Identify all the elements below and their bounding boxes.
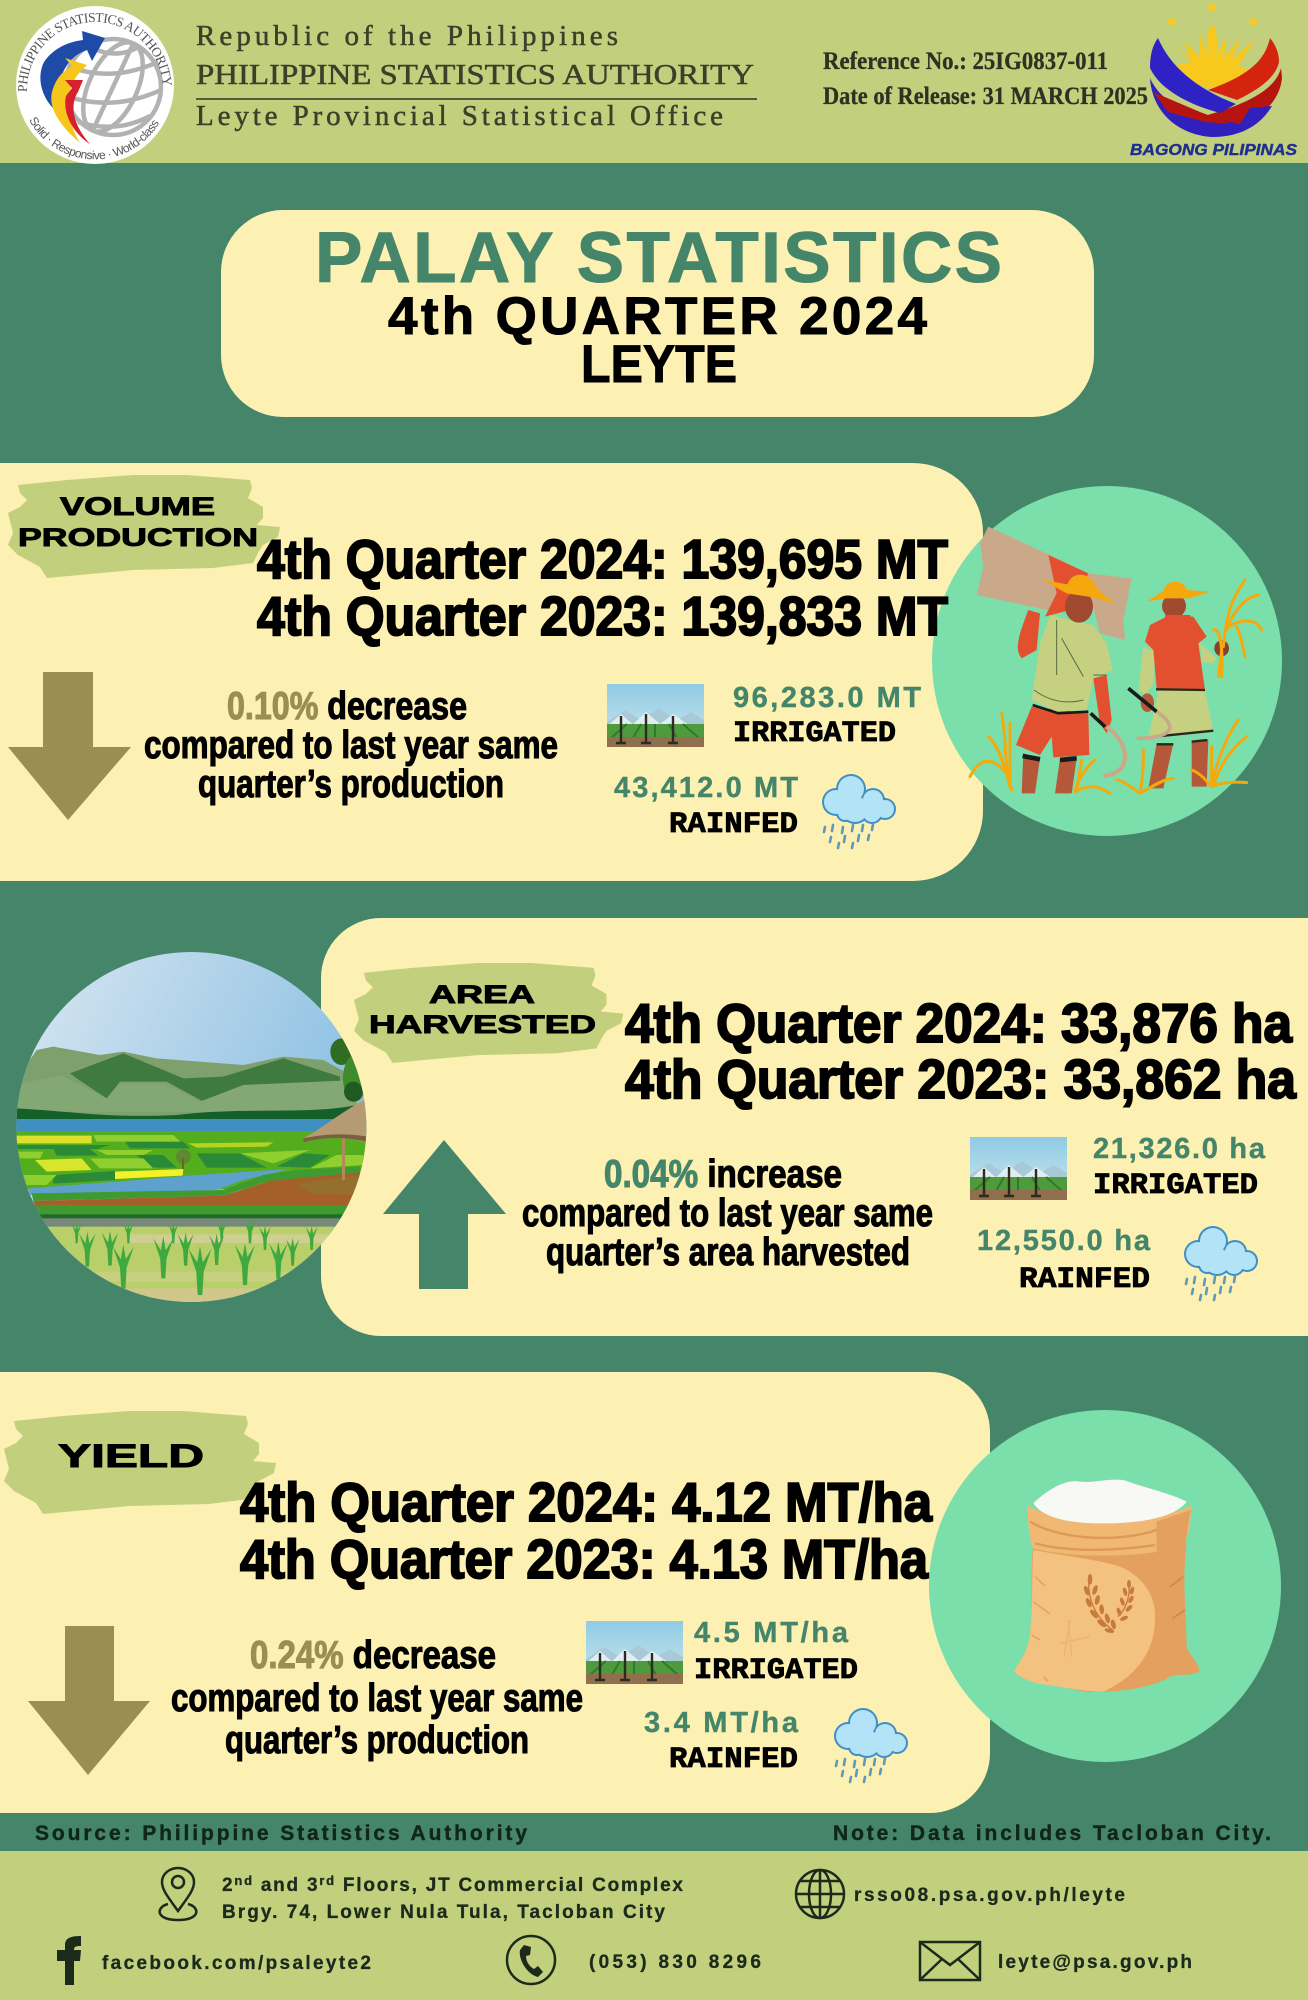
rainfed yield: RAINFED — [669, 1743, 798, 1777]
arrow: decrease — [8, 672, 131, 820]
address: 2 — [222, 1875, 233, 1896]
rainfed volume: RAINFED — [669, 808, 798, 842]
icon: PSA logo — [16, 6, 174, 164]
rainfed area: 12,550.0 ha — [977, 1225, 1151, 1257]
footer band — [0, 1851, 1308, 2000]
panel: area harvested — [10, 918, 1308, 1336]
text: volume change: compared to last year same — [144, 724, 558, 767]
data note: Note: Data includes Tacloban City. — [833, 1822, 1271, 1845]
label: volume production: VOLUME — [60, 493, 215, 521]
address: Brgy. 74, Lower Nula Tula, Tacloban City — [222, 1902, 665, 1923]
address: nd — [234, 1873, 252, 1888]
label: yield — [4, 1411, 276, 1514]
address: rd — [319, 1873, 334, 1888]
rainfed volume — [614, 772, 798, 842]
rainfed yield: 3.4 MT/ha — [644, 1707, 799, 1739]
text: volume change — [144, 685, 558, 806]
rainfed volume: 43,412.0 MT — [614, 772, 798, 804]
header: reference and release date — [823, 48, 1148, 110]
volume values: 4th Quarter 2024: 139,695 MT — [257, 528, 948, 590]
illustration: rice sack in green circle — [929, 1410, 1281, 1762]
irrigated volume — [733, 682, 921, 751]
subtitle: province: LEYTE — [581, 335, 737, 394]
irrigated area: IRRIGATED — [1093, 1169, 1258, 1203]
text: volume change: quarter’s production — [198, 763, 504, 806]
text: area change: 0.04% increase — [604, 1153, 842, 1196]
icon: location pin — [160, 1868, 196, 1920]
address: Floors, JT Commercial Complex — [336, 1875, 683, 1896]
icon: irrigated field — [584, 1621, 683, 1684]
label: area harvested: AREA — [429, 981, 535, 1009]
title: PALAY STATISTICS — [315, 219, 1002, 298]
icon: irrigated field — [968, 1137, 1067, 1200]
icon: irrigated field — [605, 684, 704, 747]
volume values: 4th Quarter 2023: 139,833 MT — [257, 585, 948, 647]
text: area change: quarter’s area harvested — [546, 1231, 910, 1274]
panel: volume production — [0, 463, 1282, 881]
logo motto: Solid · Responsive · World-class — [30, 117, 158, 160]
arrow: decrease — [28, 1626, 150, 1775]
illustration: farmers in green circle — [932, 486, 1282, 836]
yield values: 4th Quarter 2023: 4.13 MT/ha — [240, 1528, 928, 1590]
yield values: 4th Quarter 2024: 4.12 MT/ha — [240, 1471, 932, 1533]
label: area harvested: HARVESTED — [369, 1011, 596, 1039]
rainfed area: RAINFED — [1019, 1263, 1150, 1297]
text: area change: compared to last year same — [522, 1192, 933, 1235]
irrigated volume: 96,283.0 MT — [733, 682, 921, 714]
text: volume change: 0.10% decrease — [227, 685, 467, 728]
irrigated yield: IRRIGATED — [694, 1654, 858, 1688]
icon: Bagong Pilipinas logo: BAGONG PILIPINAS — [1130, 142, 1297, 159]
label: yield: YIELD — [58, 1438, 204, 1474]
text: area change — [522, 1153, 933, 1274]
irrigated area: 21,326.0 ha — [1093, 1133, 1266, 1165]
area values — [625, 992, 1296, 1110]
address — [222, 1873, 683, 1923]
header band — [0, 0, 1308, 164]
icon: phone — [507, 1936, 555, 1984]
text: yield change: quarter’s production — [225, 1719, 529, 1762]
icon: facebook — [57, 1936, 81, 1985]
icon: Bagong Pilipinas logo — [1130, 3, 1297, 159]
label: volume production: PRODUCTION — [18, 524, 258, 552]
header: agency text: PHILIPPINE STATISTICS AUTHORITY — [196, 59, 754, 91]
icon: envelope — [920, 1942, 980, 1980]
phone number: (053) 830 8296 — [589, 1952, 761, 1973]
header: reference and release date: Reference No.: 25IG0837-011 — [823, 48, 1108, 75]
header: agency text: Leyte Provincial Statistical Office — [196, 100, 723, 132]
website: rsso08.psa.gov.ph/leyte — [854, 1885, 1125, 1906]
panel: yield — [0, 1372, 1281, 1813]
icon: globe — [796, 1870, 844, 1918]
address: and 3 — [254, 1875, 318, 1896]
label: volume production — [8, 475, 280, 578]
text: yield change — [171, 1634, 583, 1762]
header: agency text: Republic of the Philippines — [196, 20, 618, 52]
icon: rain cloud — [822, 774, 896, 848]
irrigated volume: IRRIGATED — [733, 717, 896, 751]
icon: rain cloud — [834, 1708, 908, 1782]
text: yield change: 0.24% decrease — [250, 1634, 496, 1677]
label: area harvested — [354, 963, 623, 1063]
illustration: rice field landscape — [10, 945, 370, 1307]
text: yield change: compared to last year same — [171, 1677, 583, 1720]
yield values — [240, 1471, 932, 1590]
icon: rain cloud — [1184, 1226, 1258, 1300]
subtitle: quarter: 4th QUARTER 2024 — [388, 287, 928, 346]
arrow: increase — [383, 1140, 506, 1289]
header: reference and release date: Date of Release: 31 MARCH 2025 — [823, 83, 1148, 110]
volume values — [257, 528, 948, 647]
rainfed yield — [644, 1707, 799, 1777]
facebook handle: facebook.com/psaleyte2 — [102, 1953, 371, 1974]
email: leyte@psa.gov.ph — [998, 1952, 1192, 1973]
irrigated yield: 4.5 MT/ha — [694, 1617, 849, 1649]
logo ring text: PHILIPPINE STATISTICS AUTHORITY — [18, 13, 172, 92]
irrigated yield — [694, 1617, 858, 1688]
rainfed area — [977, 1225, 1151, 1297]
title panel — [221, 210, 1094, 417]
header: agency text — [196, 20, 757, 132]
irrigated area — [1093, 1133, 1266, 1203]
source note: Source: Philippine Statistics Authority — [35, 1822, 527, 1845]
